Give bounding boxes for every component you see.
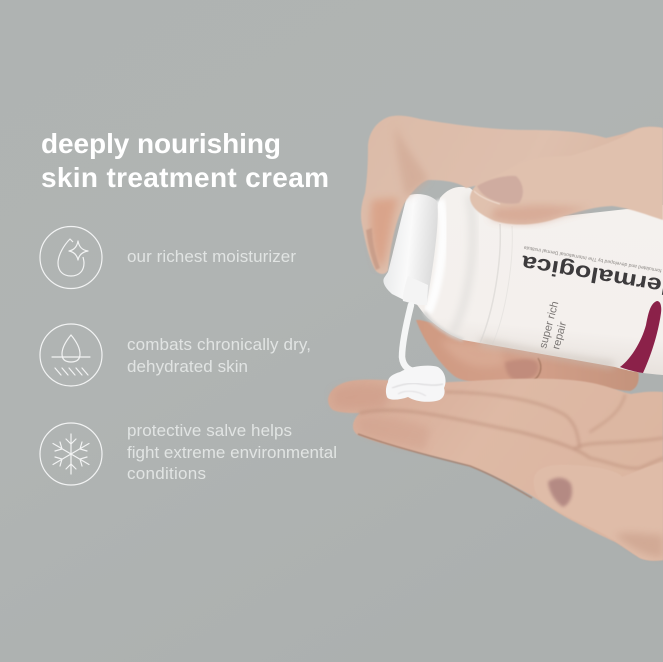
bottle body: [412, 187, 663, 375]
bottle lower shadow: [480, 338, 615, 368]
text: protective salve: conditions: [127, 464, 206, 483]
heading: [41, 128, 329, 193]
upper hand: [361, 116, 663, 274]
knuckle shadow: [395, 125, 428, 198]
product name: super rich: [537, 300, 561, 350]
heading: skin treatment cream: [41, 162, 329, 193]
index finger warm shading: [370, 198, 398, 268]
thumb lower shadow: [615, 533, 663, 558]
fingertip tint: [332, 385, 390, 409]
text: combats chronically dry: dehydrated skin: [127, 357, 248, 376]
cream stream: [402, 305, 418, 371]
underside shadow of fingers: [358, 434, 532, 498]
bottle neck shading: [428, 200, 443, 312]
thumbnail: [548, 478, 572, 507]
magenta band: [620, 301, 661, 373]
small text on bottle: formulated and developed by The International Dermal Institute: [523, 244, 662, 273]
nozzle: [403, 276, 428, 305]
icon: snowflake: [40, 423, 102, 485]
icon: droplet with sparkle: [40, 226, 102, 288]
thumb at lower right: [534, 462, 663, 560]
product name: repair: [550, 320, 569, 351]
thumb: [470, 127, 663, 225]
text: combats chronically dry: [127, 335, 311, 376]
text: protective salve: protective salve helps: [127, 421, 292, 440]
cream dollop: [386, 366, 446, 402]
heading: deeply nourishing: [41, 128, 281, 159]
thumb shading: [490, 205, 590, 223]
lower hand: open palm with fingers: [328, 379, 663, 561]
text: protective salve: [127, 421, 337, 483]
lower hand: back fingers behind bottle: [416, 320, 639, 391]
thumbnail: [477, 176, 523, 204]
pump cap: [383, 194, 438, 303]
palm creases: [360, 392, 663, 468]
icon: droplet on skin: [40, 324, 102, 386]
text: combats chronically dry: combats chronically dry,: [127, 335, 311, 354]
text: our richest moisturizer: our richest moisturizer: [127, 247, 296, 266]
text: protective salve: fight extreme environmental: [127, 443, 337, 462]
bottle: [383, 187, 663, 375]
